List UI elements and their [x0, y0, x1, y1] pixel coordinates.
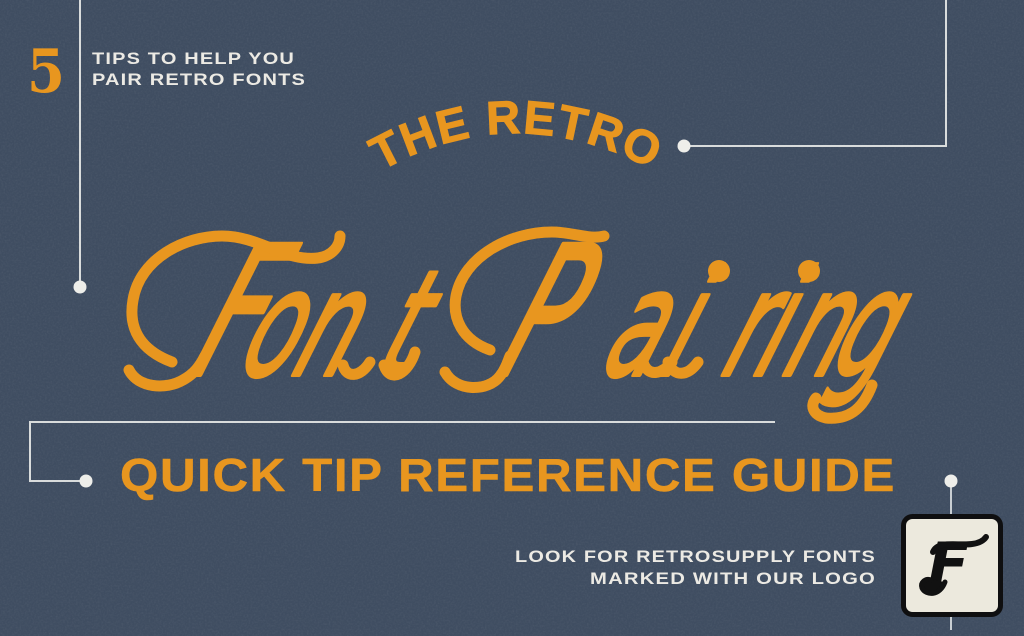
tips text: TIPS TO HELP YOU	[92, 49, 295, 68]
logo note text: MARKED WITH OUR LOGO	[590, 569, 876, 588]
logo badge	[904, 516, 1000, 614]
tips text	[92, 49, 306, 89]
logo badge: F	[928, 530, 969, 600]
number 5: 5	[27, 37, 65, 107]
bottom-right connector line with dot	[944, 474, 958, 630]
logo note text	[515, 547, 876, 588]
middle-left bracket line with dot	[30, 422, 775, 488]
logo note text: LOOK FOR RETROSUPPLY FONTS	[515, 547, 876, 566]
subtitle: QUICK TIP REFERENCE GUIDE	[120, 449, 896, 501]
top-left connector line with dot	[74, 0, 86, 294]
arched heading: THE RETRO	[366, 100, 660, 167]
i dots	[708, 260, 820, 282]
title flourishes	[129, 232, 872, 418]
tips text: PAIR RETRO FONTS	[92, 70, 306, 89]
script title	[171, 208, 948, 418]
script title: F	[171, 208, 315, 418]
top-right connector line with dot	[678, 0, 946, 152]
script title: airing	[586, 239, 936, 410]
script title: P	[477, 208, 623, 418]
script title: ont	[223, 239, 463, 410]
